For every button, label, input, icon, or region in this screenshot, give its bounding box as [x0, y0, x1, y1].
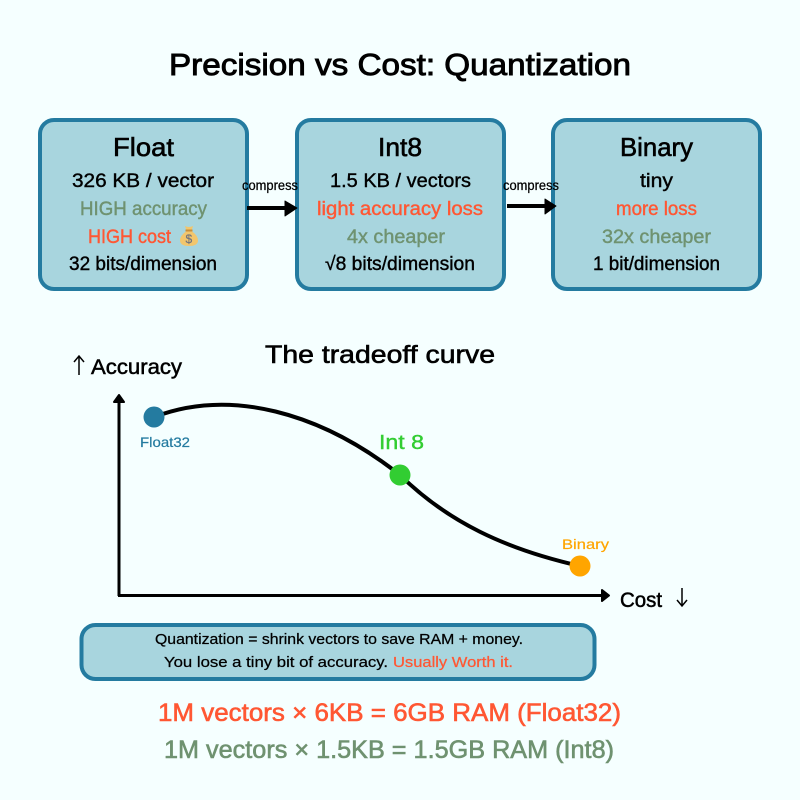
point: Binary — [562, 536, 609, 576]
point: Float32 — [140, 406, 190, 450]
heading: Float: Float — [113, 132, 175, 162]
arrow: Float to Int8 — [242, 177, 298, 216]
stat: Int8 RAM: 1M vectors × 1.5KB = 1.5GB RAM (Int8) — [164, 736, 614, 764]
text: accuracy: more loss — [616, 199, 697, 220]
text: size: 1.5 KB / vectors — [330, 171, 471, 192]
heading: tradeoff curve: The tradeoff curve — [265, 341, 495, 369]
point: Binary: Binary — [562, 536, 609, 552]
x axis label — [620, 588, 687, 612]
curve — [154, 405, 580, 566]
point: Float32: Float32 — [140, 434, 190, 450]
heading: Binary: Binary — [620, 132, 693, 162]
x axis label: Cost — [620, 589, 662, 612]
x axis — [118, 590, 609, 601]
arrow: Float to Int8: compress — [242, 177, 298, 193]
callout: Usually Worth it. — [393, 654, 513, 671]
panel: Int8 — [297, 120, 504, 289]
text: size: 326 KB / vector — [72, 171, 215, 192]
y axis label: Accuracy — [91, 356, 183, 379]
y axis — [114, 395, 124, 596]
stat: Float32 RAM: 1M vectors × 6KB = 6GB RAM (Float32) — [158, 699, 621, 727]
arrow: Int8 to Binary — [503, 177, 559, 214]
text: bits: 1 bit/dimension — [593, 254, 720, 275]
heading: Int8: Int8 — [378, 132, 422, 162]
text: accuracy: light accuracy loss — [317, 199, 483, 220]
text: bits: 32 bits/dimension — [69, 254, 217, 275]
title: Precision vs Cost: Quantization — [169, 47, 631, 82]
text: size: tiny — [640, 171, 674, 192]
callout: Quantization = shrink vectors to save RAM + money. — [155, 631, 523, 648]
text: bits: √8 bits/dimension — [325, 254, 475, 275]
point: Int 8: Int 8 — [379, 432, 424, 454]
arrow: Int8 to Binary: compress — [503, 177, 559, 193]
panel: Binary — [553, 120, 760, 289]
point: Int 8 — [379, 432, 424, 486]
text: cost: HIGH cost — [88, 227, 172, 248]
chart: tradeoff curve — [74, 356, 687, 612]
callout — [82, 625, 594, 679]
icon: money bag: $ — [186, 232, 192, 246]
icon: money bag — [180, 226, 198, 246]
text: accuracy: HIGH accuracy — [80, 199, 207, 220]
panel: Float — [40, 120, 247, 289]
callout: You lose a tiny bit of accuracy. — [164, 654, 388, 671]
text: cost: 4x cheaper — [347, 227, 446, 248]
text: cost: 32x cheaper — [602, 227, 712, 248]
